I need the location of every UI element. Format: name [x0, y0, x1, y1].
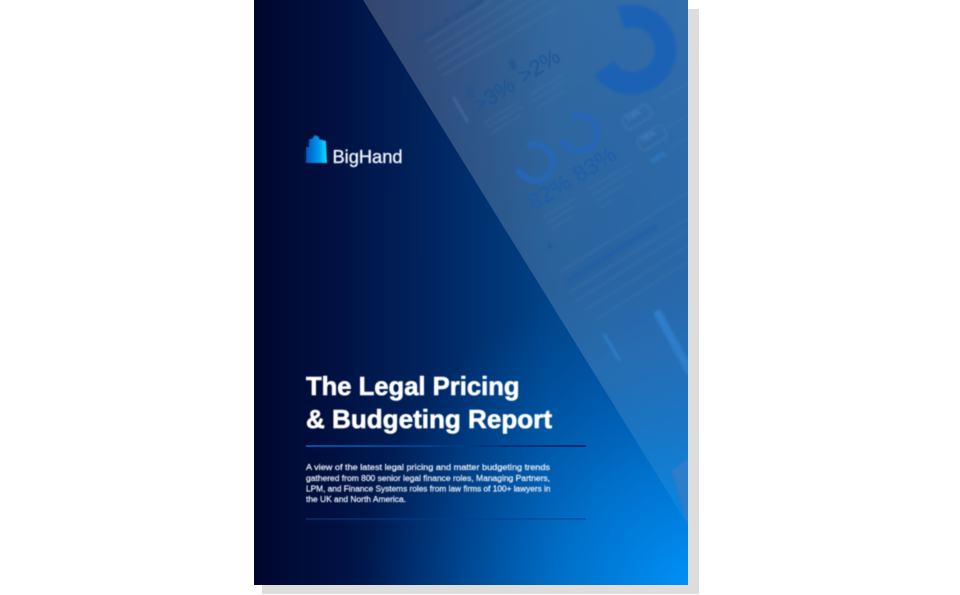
tilted dashboard page: 68% [649, 150, 668, 166]
upper divider [306, 445, 586, 447]
description text: LPM, and Finance Systems roles from law firms of 100+ lawyers in [306, 484, 550, 494]
icon: building [306, 135, 327, 163]
report cover illustration [254, 0, 699, 594]
BigHand logo [306, 135, 402, 167]
lower divider [306, 518, 586, 520]
title: & Budgeting Report [306, 404, 552, 434]
dashboard figures: 83% [568, 141, 621, 187]
bar chart fragments [603, 309, 688, 524]
percentage pills [621, 103, 668, 152]
tilted dashboard page: 78% [639, 129, 658, 145]
description text: the UK and North America. [306, 495, 406, 504]
logo wordmark: BigHand [332, 146, 402, 167]
page drop shadow [262, 9, 699, 594]
title: The Legal Pricing [306, 371, 520, 401]
vertical chart label [453, 97, 468, 122]
large donut chart [594, 5, 676, 95]
small donut charts [518, 115, 598, 180]
section headings [416, 0, 656, 282]
title [306, 371, 552, 434]
placeholder copy lines [432, 19, 458, 38]
tilted dashboard page: 74% [624, 108, 643, 124]
description text: A view of the latest legal pricing and matter budgeting trends [306, 463, 550, 472]
dashboard figures: 82% [523, 169, 576, 215]
dashboard figures: >3% [468, 72, 520, 117]
dashboard figures [474, 50, 616, 209]
section headings: Adapting and innovating [564, 221, 659, 286]
cover panel [254, 0, 700, 585]
dashboard figures: >2% [513, 43, 565, 88]
small table icons [465, 59, 552, 248]
description text [306, 463, 550, 504]
description text: gathered from 800 senior legal finance roles, Managing Partners, [306, 474, 550, 483]
tilted dashboard page [363, 0, 700, 525]
section headings: 64% [625, 314, 648, 334]
